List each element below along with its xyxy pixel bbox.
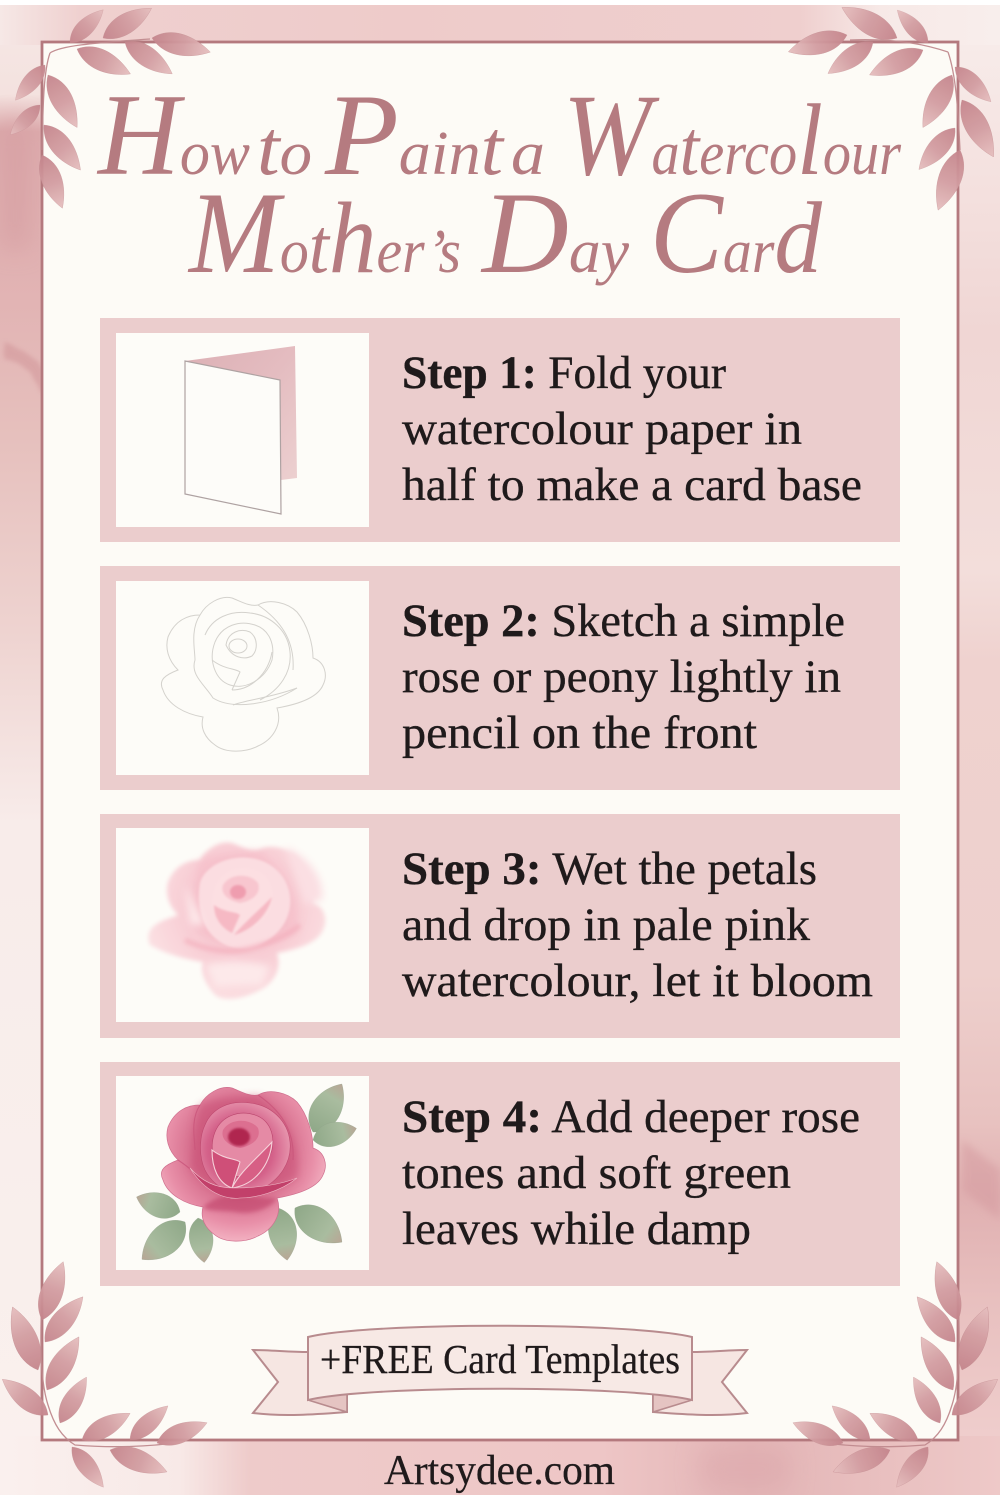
title: Mother’s	[187, 169, 461, 298]
step 1 text: watercolour paper in	[402, 403, 802, 455]
step 4 text: leaves while damp	[402, 1203, 751, 1255]
leaves: top left corner	[5, 0, 213, 212]
step 1 text: half to make a card base	[402, 459, 862, 511]
icon: pencil rose sketch	[161, 597, 325, 751]
title	[96, 71, 902, 298]
step 1 text: Step 1: Fold your	[402, 347, 726, 399]
panel: step 2	[100, 566, 900, 790]
title: to	[257, 104, 312, 191]
panel: step 1	[100, 318, 900, 542]
icon: folded card	[185, 346, 297, 514]
banner text: +FREE Card Templates	[320, 1336, 680, 1382]
step 3 text: Step 3: Wet the petals	[402, 843, 817, 895]
step 3 text: and drop in pale pink	[402, 899, 810, 951]
title: a	[511, 120, 545, 188]
step 1 text	[402, 347, 862, 511]
leaves: bottom left corner	[0, 1258, 211, 1493]
title: Card	[650, 169, 823, 298]
step 4 text	[402, 1091, 860, 1255]
title: Paint	[324, 71, 505, 200]
step 4 text: Step 4: Add deeper rose	[402, 1091, 860, 1143]
step 3 text: watercolour, let it bloom	[402, 955, 873, 1007]
step 2 text: pencil on the front	[402, 707, 757, 759]
step 3 text	[402, 843, 873, 1007]
title: Day	[480, 169, 629, 298]
leaves: bottom right corner	[789, 1258, 1000, 1493]
panel: step 4	[100, 1062, 900, 1286]
step 2 text: Step 2: Sketch a simple	[402, 595, 845, 647]
website footer: Artsydee.com	[384, 1448, 615, 1494]
leaves: top right corner	[785, 0, 1000, 214]
icon: green leaves	[132, 1076, 359, 1271]
step 2 text: rose or peony lightly in	[402, 651, 841, 703]
title: Watercolour	[563, 71, 902, 200]
title: How	[96, 71, 250, 200]
step 4 text: tones and soft green	[402, 1147, 791, 1199]
step 2 text	[402, 595, 845, 759]
panel: step 3	[100, 814, 900, 1038]
ribbon banner	[253, 1326, 747, 1415]
icon: deep pink rose	[161, 1087, 325, 1241]
icon: pale pink rose wash	[148, 842, 325, 999]
